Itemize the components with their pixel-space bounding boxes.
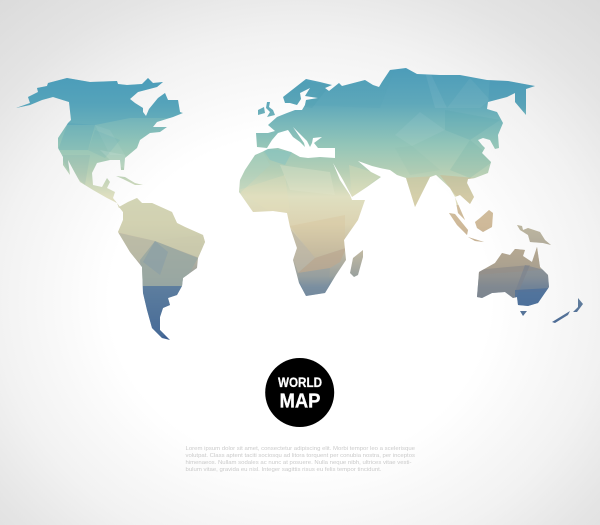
lorem ipsum text block: bulum vitae, gravida eu nisl. Integer sagittis risus eu felis tempor tincidunt. (186, 467, 382, 473)
low-poly facets (15, 68, 555, 345)
world map (15, 68, 583, 345)
Madagascar (350, 250, 363, 277)
Eurasia and Africa (239, 68, 535, 296)
North America (16, 78, 183, 208)
badge word: WORLD: WORLD (278, 375, 322, 390)
Java (468, 237, 484, 242)
New Zealand south island (552, 311, 570, 323)
New Zealand north island (573, 298, 583, 312)
black circle (265, 358, 334, 427)
lorem ipsum text block: Lorem ipsum dolor sit amet, consectetur adipiscing elit. Morbi tempor leo a scelerisque (186, 446, 415, 452)
Sumatra (449, 213, 468, 235)
lorem ipsum text block (186, 446, 415, 473)
badge: world map (265, 358, 334, 427)
South America (118, 198, 205, 340)
lorem ipsum text block: volutpat. Class aptent taciti sociosqu ad litora torquent per conubia nostra, per inceptos (186, 453, 415, 459)
Great Britain (266, 102, 275, 117)
badge word: MAP: MAP (280, 390, 320, 412)
New Guinea (517, 225, 551, 245)
lorem ipsum text block: himenaeos. Nullam sodales ac nunc at posuere. Nulla neque nibh, ultrices vitae vesti- (186, 460, 412, 466)
Ireland (258, 107, 265, 115)
Caribbean islands (116, 176, 143, 185)
Australia (477, 247, 549, 306)
Tasmania (520, 311, 527, 316)
Borneo (475, 210, 493, 232)
